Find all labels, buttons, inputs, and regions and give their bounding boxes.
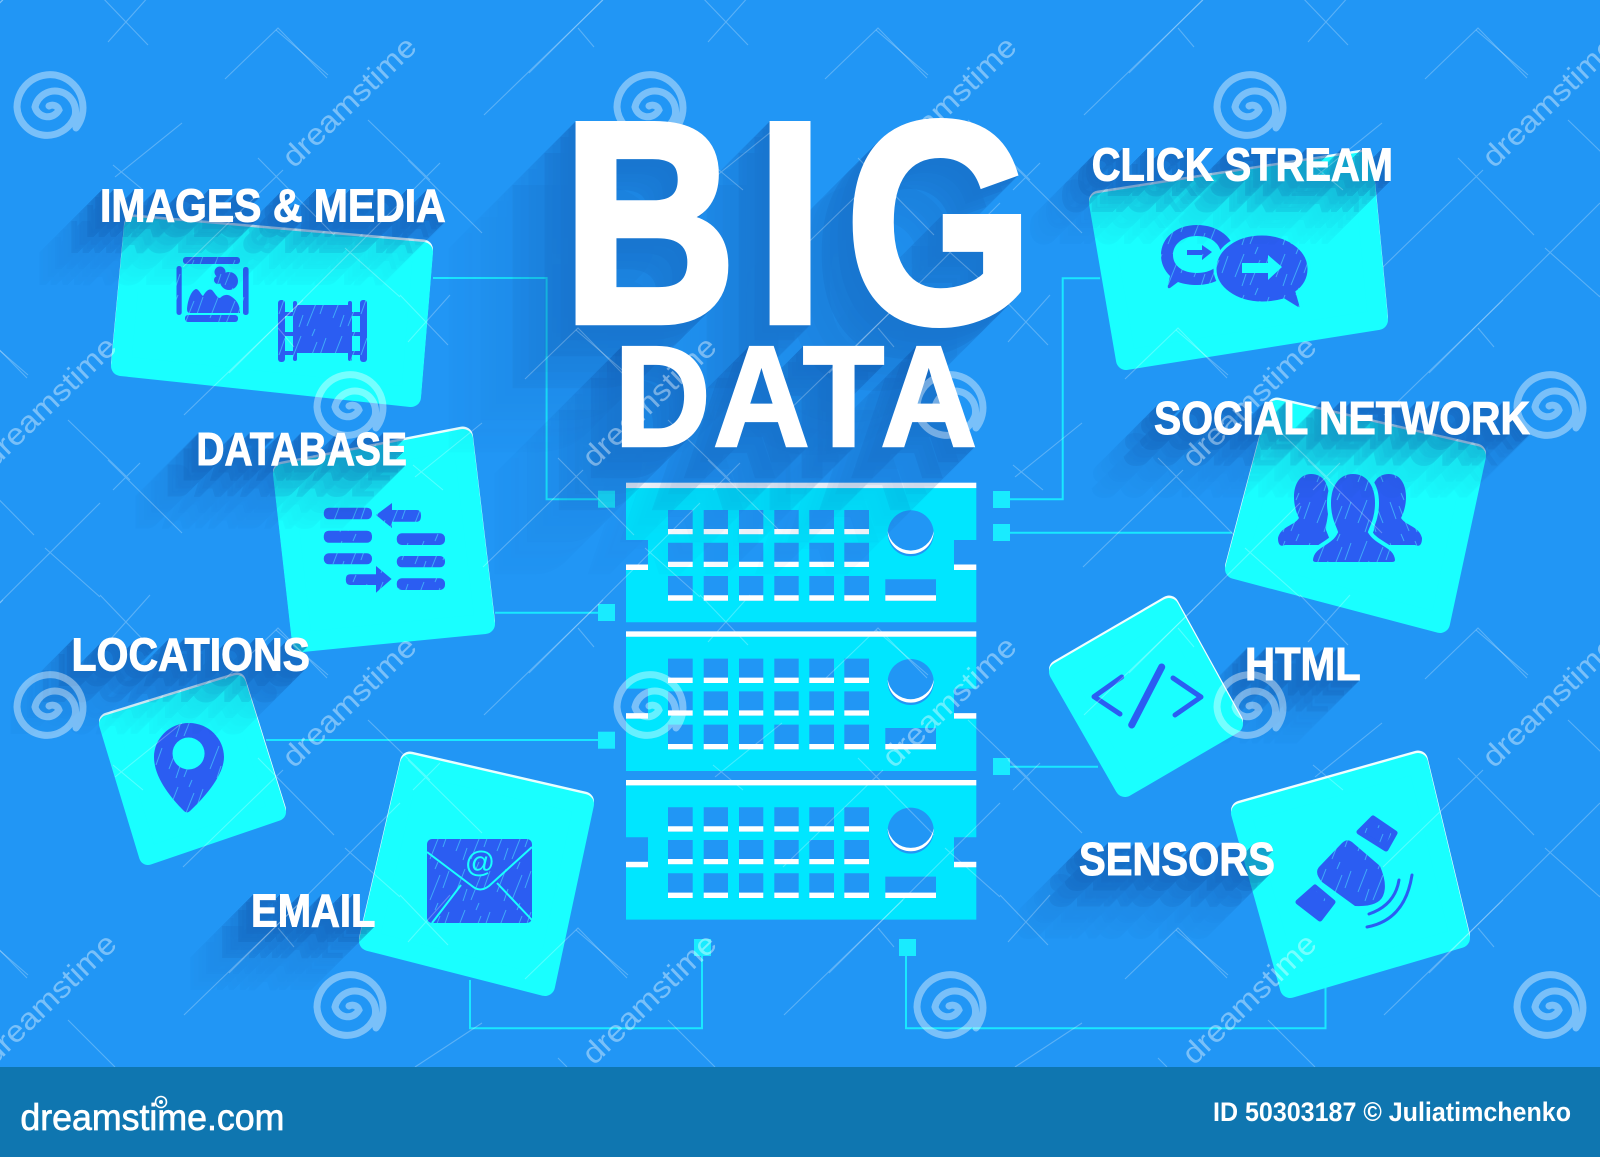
footer logo: dreamstime.com bbox=[20, 1097, 284, 1138]
icon: chat arrows bbox=[1161, 225, 1309, 309]
label: social network: SOCIAL NETWORK bbox=[1154, 392, 1530, 444]
label: sensors: SENSORS bbox=[1079, 833, 1275, 885]
watermark overlay: dreamstime bbox=[576, 330, 723, 474]
connector nodes bbox=[598, 491, 1010, 956]
watermark overlay: dreamstime bbox=[1176, 927, 1323, 1071]
icon: picture bbox=[176, 257, 249, 322]
watermark overlay: dreamstime bbox=[1176, 330, 1323, 474]
icon: envelope: @ bbox=[465, 846, 495, 879]
watermark overlay: dreamstime bbox=[276, 630, 423, 774]
panel: click stream bbox=[1092, 139, 1393, 360]
panel: email bbox=[251, 762, 584, 986]
watermark overlay: dreamstime bbox=[876, 30, 1023, 174]
title: big data bbox=[563, 63, 1033, 477]
watermark overlay: dreamstime bbox=[876, 630, 1023, 774]
title word: BIG: BIG bbox=[563, 63, 1033, 382]
panel: social network bbox=[1154, 392, 1530, 623]
title word: DATA: DATA bbox=[614, 317, 977, 477]
icon: satellite bbox=[1298, 818, 1412, 927]
watermark overlay: dreamstime bbox=[276, 30, 423, 174]
label: locations: LOCATIONS bbox=[72, 629, 310, 681]
server unit 3 bbox=[626, 780, 976, 920]
panel: images and media bbox=[100, 180, 446, 397]
label: html: HTML bbox=[1245, 638, 1361, 690]
label: email: EMAIL bbox=[251, 885, 376, 937]
label: database: DATABASE bbox=[196, 423, 407, 475]
panel: html bbox=[1059, 606, 1361, 787]
icon: map pin bbox=[154, 723, 224, 812]
server unit 2 bbox=[626, 631, 976, 771]
icon: data transfer bbox=[324, 503, 445, 593]
panel: database bbox=[196, 423, 485, 642]
icon: people group bbox=[1278, 472, 1422, 564]
connector lines bbox=[266, 278, 1326, 1028]
server unit 1 bbox=[626, 483, 976, 622]
icon: code brackets bbox=[1094, 667, 1201, 725]
panel: locations bbox=[72, 629, 310, 856]
panel: sensors bbox=[1079, 760, 1460, 988]
icon: envelope bbox=[427, 839, 532, 923]
label: images and media: IMAGES & MEDIA bbox=[100, 180, 446, 232]
footer bar bbox=[0, 1067, 1600, 1157]
watermark overlay: dreamstime bbox=[576, 927, 723, 1071]
label: click stream: CLICK STREAM bbox=[1092, 139, 1393, 191]
icon: film strip bbox=[278, 300, 367, 362]
server rack stack bbox=[626, 483, 976, 920]
footer credit: ID 50303187 © Juliatimchenko bbox=[1213, 1097, 1571, 1127]
